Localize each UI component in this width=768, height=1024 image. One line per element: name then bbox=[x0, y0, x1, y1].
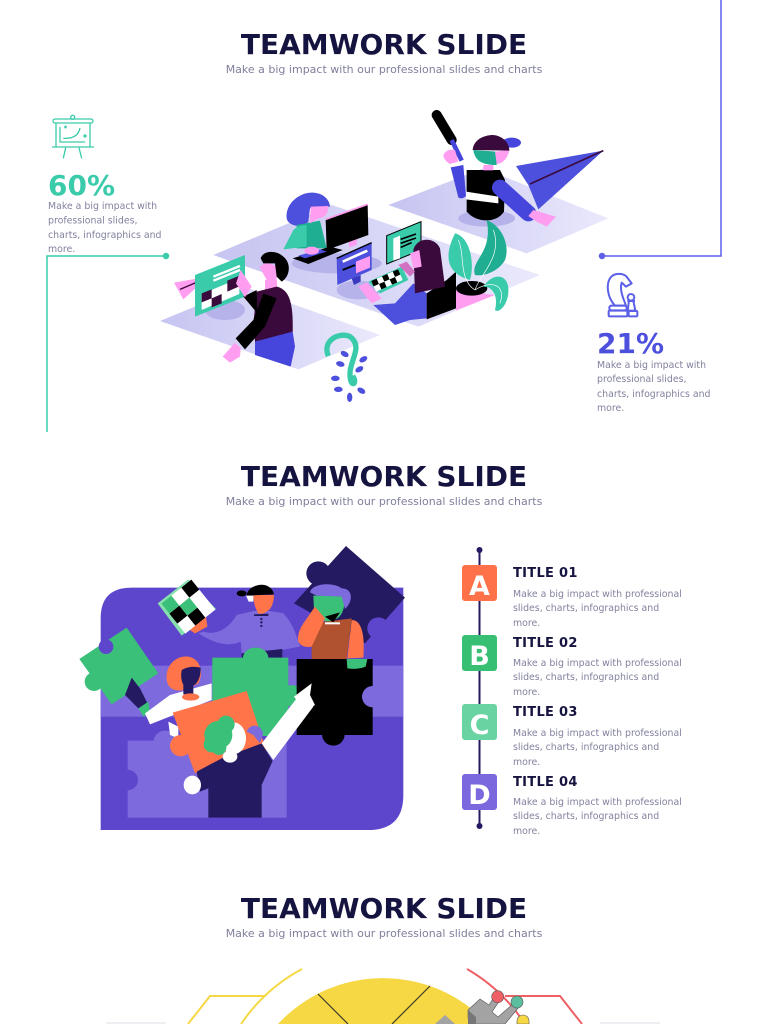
item A bbox=[462, 565, 682, 629]
puzzle: black bbox=[297, 659, 383, 746]
text: right description bbox=[597, 360, 711, 414]
puzzle: orange bbox=[170, 691, 267, 773]
hand on puzzle bbox=[347, 659, 367, 669]
floor panels bbox=[160, 168, 608, 369]
text: right description: charts, infographics and bbox=[597, 389, 711, 400]
item D: D bbox=[468, 780, 491, 811]
item A: slides, charts, infographics and bbox=[513, 603, 659, 614]
stat: 21%: 21% bbox=[597, 327, 664, 360]
stat: 60%: 60% bbox=[48, 169, 115, 202]
icon: grey hand with pins bbox=[468, 991, 529, 1024]
arc and connector: red bbox=[467, 969, 582, 1024]
item B: slides, charts, infographics and bbox=[513, 672, 659, 683]
item D bbox=[462, 774, 682, 837]
faded stat tops bbox=[106, 1022, 660, 1024]
item C: more. bbox=[513, 757, 540, 768]
item B: Make a big impact with professional bbox=[513, 658, 682, 669]
item D: Make a big impact with professional bbox=[513, 797, 682, 808]
item B: more. bbox=[513, 687, 540, 698]
text: left description: professional slides, bbox=[48, 216, 137, 226]
item C bbox=[462, 704, 682, 768]
illustration: isometric team at work bbox=[160, 115, 608, 402]
person: woman on phone bbox=[298, 584, 364, 659]
puzzle: green left bbox=[79, 628, 158, 704]
puzzle: green center bbox=[212, 648, 302, 736]
item C: Make a big impact with professional bbox=[513, 728, 682, 739]
item D: TITLE 04 bbox=[513, 775, 578, 790]
monitor: green screen bbox=[387, 222, 421, 264]
arc and connector: yellow bbox=[188, 969, 302, 1024]
subtitle: section three: Make a big impact with our professional slides and charts bbox=[226, 927, 543, 940]
item A: more. bbox=[513, 618, 540, 629]
item C: C bbox=[470, 710, 489, 741]
puzzle: dark navy bbox=[294, 546, 405, 643]
connector: teal bbox=[47, 254, 168, 432]
text: left description bbox=[48, 201, 162, 255]
person: man at green board bbox=[174, 252, 295, 367]
title: section three: TEAMWORK SLIDE bbox=[241, 892, 527, 925]
item B: TITLE 02 bbox=[513, 636, 578, 651]
monitor: blue screen bbox=[337, 243, 380, 299]
item A: Make a big impact with professional bbox=[513, 589, 682, 600]
timeline spine bbox=[476, 547, 482, 829]
item C: TITLE 03 bbox=[513, 705, 578, 720]
person: man with cap holding board bbox=[158, 579, 300, 658]
icon: presentation board bbox=[52, 115, 94, 158]
person: woman with keyboard bbox=[358, 240, 456, 325]
person: foreground man pointing bbox=[184, 683, 315, 818]
purple background panel bbox=[101, 588, 403, 830]
text: right description: more. bbox=[597, 403, 624, 414]
text: left description: Make a big impact with bbox=[48, 201, 157, 212]
item B bbox=[462, 635, 682, 698]
plant: teal vine with blue leaves bbox=[327, 335, 368, 402]
person: standing with paper plane bbox=[437, 115, 603, 227]
item A: TITLE 01 bbox=[513, 566, 578, 581]
illustration: team with puzzle pieces bbox=[79, 546, 405, 830]
subtitle: section one: Make a big impact with our professional slides and charts bbox=[226, 63, 543, 76]
connector: blue bbox=[600, 0, 721, 258]
person: woman at desktop bbox=[283, 193, 382, 273]
text: right description: professional slides, bbox=[597, 374, 686, 385]
text: right description: Make a big impact with bbox=[597, 360, 706, 371]
item D: more. bbox=[513, 826, 540, 837]
text: left description: charts, infographics and bbox=[48, 230, 162, 241]
chart: yellow segmented circle bbox=[278, 978, 488, 1024]
item D: slides, charts, infographics and bbox=[513, 811, 659, 822]
title: section two: TEAMWORK SLIDE bbox=[241, 460, 527, 493]
plant: potted leaves bbox=[448, 220, 508, 311]
icon: chess knight and pawn bbox=[608, 274, 637, 316]
text: left description: more. bbox=[48, 244, 75, 255]
item B: B bbox=[469, 641, 490, 672]
item C: slides, charts, infographics and bbox=[513, 742, 659, 753]
puzzle: light purple bbox=[117, 731, 287, 818]
person: woman with orange hair bbox=[125, 656, 212, 738]
subtitle: section two: Make a big impact with our professional slides and charts bbox=[226, 495, 543, 508]
title: section one: TEAMWORK SLIDE bbox=[241, 28, 527, 61]
item A: A bbox=[469, 571, 490, 602]
